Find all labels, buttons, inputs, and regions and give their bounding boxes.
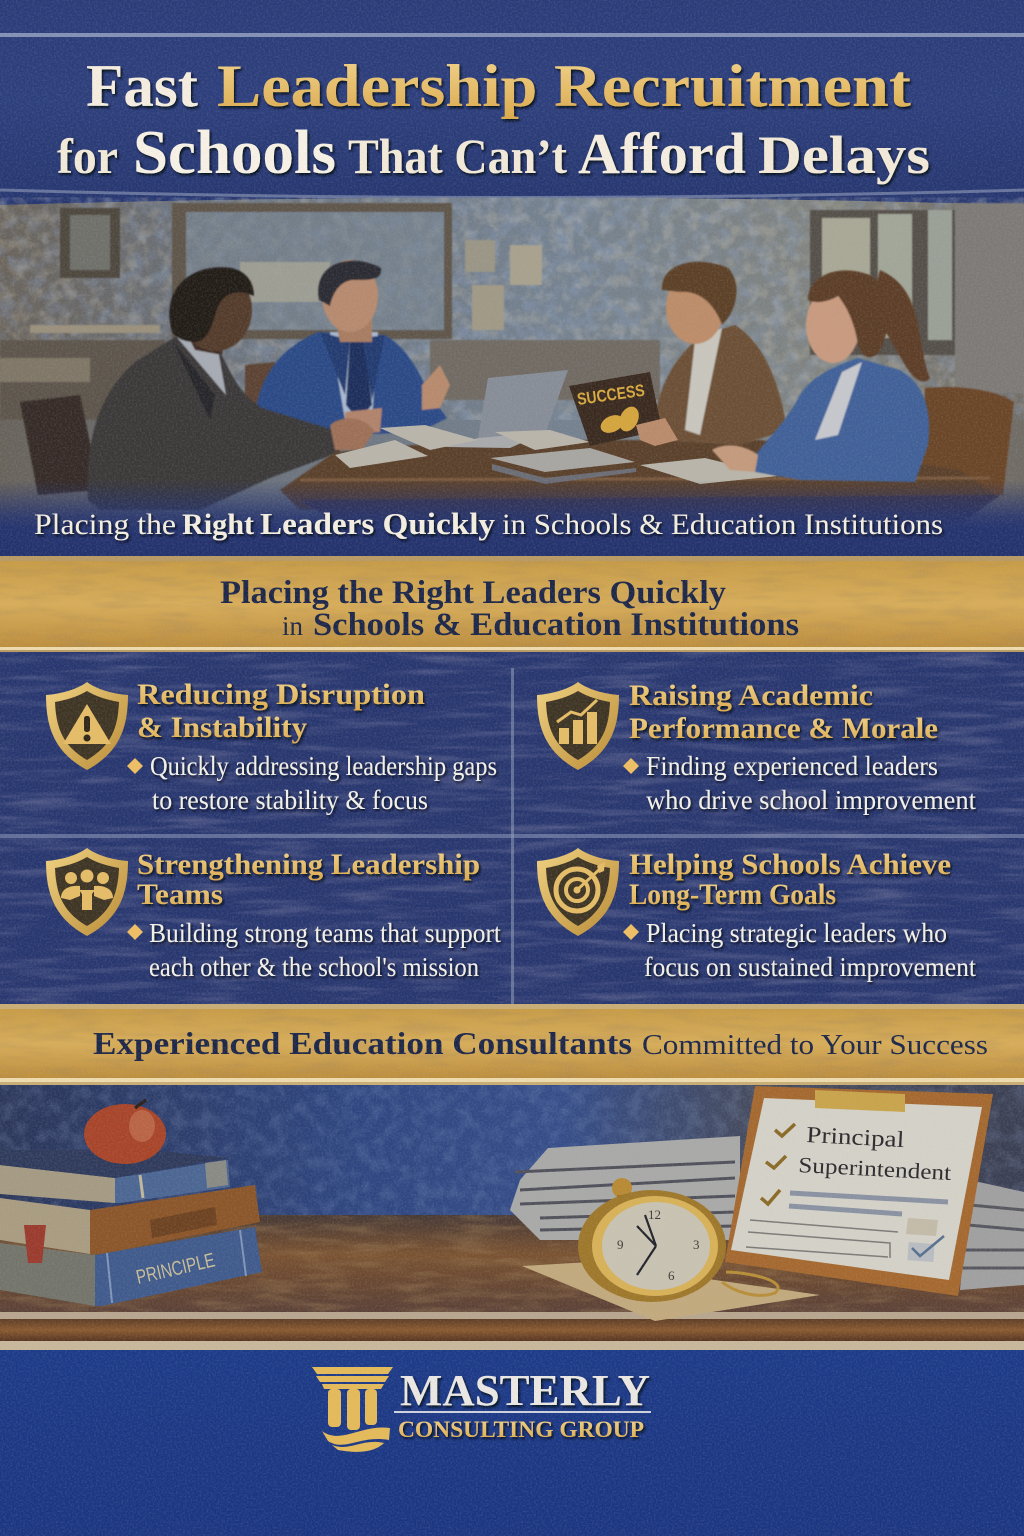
title: Afford (578, 121, 746, 186)
man in blue suit (254, 260, 450, 435)
card: reducing disruption (46, 678, 497, 815)
heading (137, 678, 425, 744)
clipboard checklist (725, 1086, 993, 1296)
man in brown jacket with book (652, 262, 787, 445)
gold banner: placing the right leaders: in (282, 611, 303, 641)
heading: Raising Academic (629, 679, 873, 712)
heading: Long-Term Goals (629, 878, 836, 911)
pocket watch: 3 (693, 1237, 700, 1252)
hero caption: in Schools & Education Institutions (502, 508, 943, 541)
heading: Strengthening Leadership (137, 848, 480, 881)
woman in blue blazer (712, 270, 930, 482)
hero caption (34, 506, 943, 541)
hero caption: Placing the (34, 508, 176, 541)
heading (629, 679, 938, 745)
icon: warning shield (46, 682, 128, 770)
logo (312, 1366, 651, 1452)
checklist text: Superintendent (798, 1152, 952, 1185)
bullet: who drive school improvement (646, 785, 976, 815)
bullet: Building strong teams that support (149, 918, 501, 948)
bottom book (0, 1227, 262, 1306)
middle book (0, 1185, 260, 1263)
card: raising academic performance (537, 679, 976, 815)
heading: Performance & Morale (629, 712, 938, 745)
title (57, 53, 930, 187)
heading (629, 848, 951, 911)
footer (0, 1350, 1024, 1536)
laptop (445, 370, 568, 448)
bullet: to restore stability & focus (152, 785, 428, 815)
hero room background (0, 198, 1024, 545)
hero caption: Leaders Quickly (260, 506, 496, 541)
chairs (20, 362, 1014, 495)
checklist text: Principal (806, 1122, 905, 1152)
gold banner: consultants (0, 1004, 1024, 1086)
logo wordmark: CONSULTING GROUP (398, 1417, 644, 1442)
gold banner: placing the right leaders: Placing the Right Leaders Quickly (220, 575, 727, 611)
bullet (623, 751, 976, 815)
heading: & Instability (137, 711, 307, 744)
hero illustration: meeting (0, 198, 1024, 560)
papers on table (335, 425, 778, 484)
bullet: Placing strategic leaders who (646, 918, 947, 948)
bullet (127, 918, 501, 982)
bullet: focus on sustained improvement (644, 952, 976, 982)
table (280, 440, 1000, 525)
title: Delays (758, 125, 930, 185)
card: strengthening leadership teams (46, 848, 501, 982)
bullet: Quickly addressing leadership gaps (150, 751, 497, 781)
icon: team shield (46, 848, 128, 936)
logo wordmark: MASTERLY (400, 1366, 650, 1415)
pocket watch (578, 1178, 778, 1302)
card: long-term goals (537, 848, 976, 982)
hero fade (0, 480, 1024, 560)
bullet (623, 918, 976, 982)
icon: target shield (537, 848, 619, 936)
bottom book: PRINCIPLE (134, 1249, 217, 1289)
title: Fast (86, 53, 198, 119)
gold banner: placing the right leaders (0, 556, 1024, 654)
top book (0, 1150, 230, 1203)
heading: Teams (137, 878, 223, 911)
bullet: each other & the school's mission (149, 952, 479, 982)
gold banner: consultants: Experienced Education Consultants (93, 1025, 632, 1061)
gold banner: placing the right leaders: Schools & Education Institutions (313, 607, 799, 643)
benefits panel (0, 652, 1024, 1008)
stack of papers (510, 1136, 1024, 1290)
logo mark: column (312, 1367, 393, 1452)
man in dark suit (88, 267, 374, 510)
heading: Helping Schools Achieve (629, 848, 951, 881)
title: for (57, 128, 118, 184)
hero caption: Right (182, 508, 254, 541)
checklist text (798, 1122, 952, 1185)
book stack (0, 1100, 262, 1306)
pocket watch: 9 (617, 1237, 624, 1252)
apple (84, 1100, 166, 1164)
bullet: Finding experienced leaders (646, 751, 938, 781)
title: That Can’t (348, 128, 567, 184)
icon: chart shield (537, 682, 619, 770)
gold banner: consultants: Committed to Your Success (642, 1029, 988, 1061)
heading (137, 848, 480, 911)
logo wordmark (398, 1366, 650, 1442)
parchment under watch (522, 1262, 820, 1321)
header band (0, 0, 1024, 205)
desk scene (0, 1085, 1024, 1350)
title: Leadership Recruitment (217, 53, 911, 119)
bullet (127, 751, 497, 815)
book: success: SUCCESS (576, 381, 646, 409)
title: Schools (133, 119, 336, 187)
pocket watch: 12 (648, 1207, 661, 1222)
book: success (569, 372, 678, 446)
heading: Reducing Disruption (137, 678, 425, 711)
pocket watch: 6 (668, 1268, 675, 1283)
